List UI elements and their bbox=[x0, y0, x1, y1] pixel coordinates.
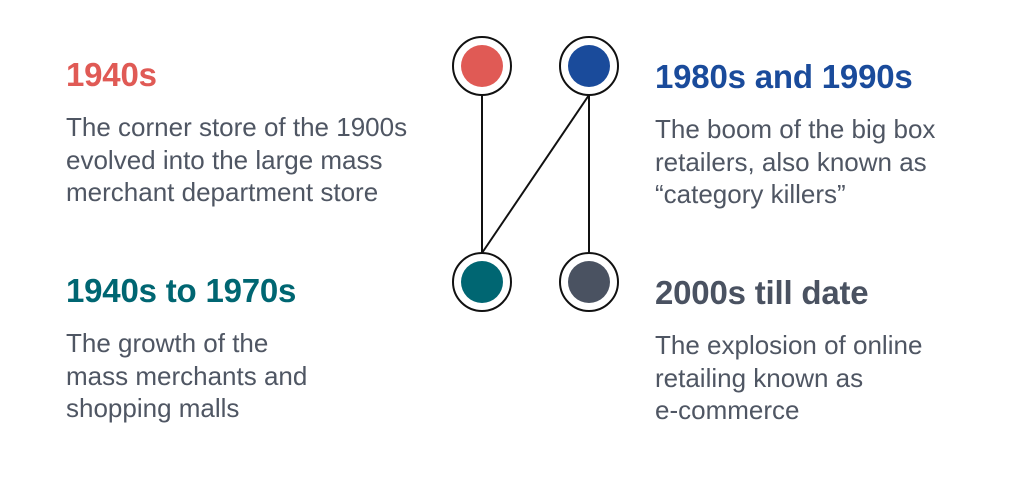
node: 1940s bbox=[453, 37, 511, 95]
heading: 1940s to 1970s: 1940s to 1970s bbox=[66, 272, 296, 309]
text: 2000s description: retailing known as bbox=[655, 362, 863, 392]
block: 2000s till date bbox=[655, 274, 922, 425]
text: 1940s-1970s description: The growth of the bbox=[66, 328, 268, 358]
text: 2000s description: e-commerce bbox=[655, 395, 799, 425]
text: 1940s description: The corner store of the 1900s bbox=[66, 112, 407, 142]
heading: 1940s: 1940s bbox=[66, 56, 157, 93]
text: 1980s description: retailers, also known as bbox=[655, 146, 927, 176]
text: 1940s description bbox=[66, 112, 407, 207]
block: 1980s and 1990s bbox=[655, 58, 935, 209]
connector lines bbox=[482, 95, 589, 253]
text: 1940s-1970s description bbox=[66, 328, 307, 423]
text: 2000s description bbox=[655, 330, 922, 425]
block: 1940s bbox=[66, 56, 407, 207]
heading: 2000s till date: 2000s till date bbox=[655, 274, 868, 311]
text: 1980s description bbox=[655, 114, 935, 209]
heading: 1980s and 1990s: 1980s and 1990s bbox=[655, 58, 913, 95]
text: 1940s-1970s description: mass merchants and bbox=[66, 360, 307, 390]
node: 1980s bbox=[560, 37, 618, 95]
node: 2000s bbox=[560, 253, 618, 311]
block: 1940s to 1970s bbox=[66, 272, 307, 423]
text: 1940s-1970s description: shopping malls bbox=[66, 393, 239, 423]
text: 1980s description: The boom of the big box bbox=[655, 114, 935, 144]
text: 1980s description: “category killers” bbox=[655, 179, 846, 209]
node: 1940s-1970s bbox=[453, 253, 511, 311]
text: 1940s description: evolved into the large mass bbox=[66, 144, 383, 174]
text: 2000s description: The explosion of online bbox=[655, 330, 922, 360]
text: 1940s description: merchant department store bbox=[66, 177, 378, 207]
